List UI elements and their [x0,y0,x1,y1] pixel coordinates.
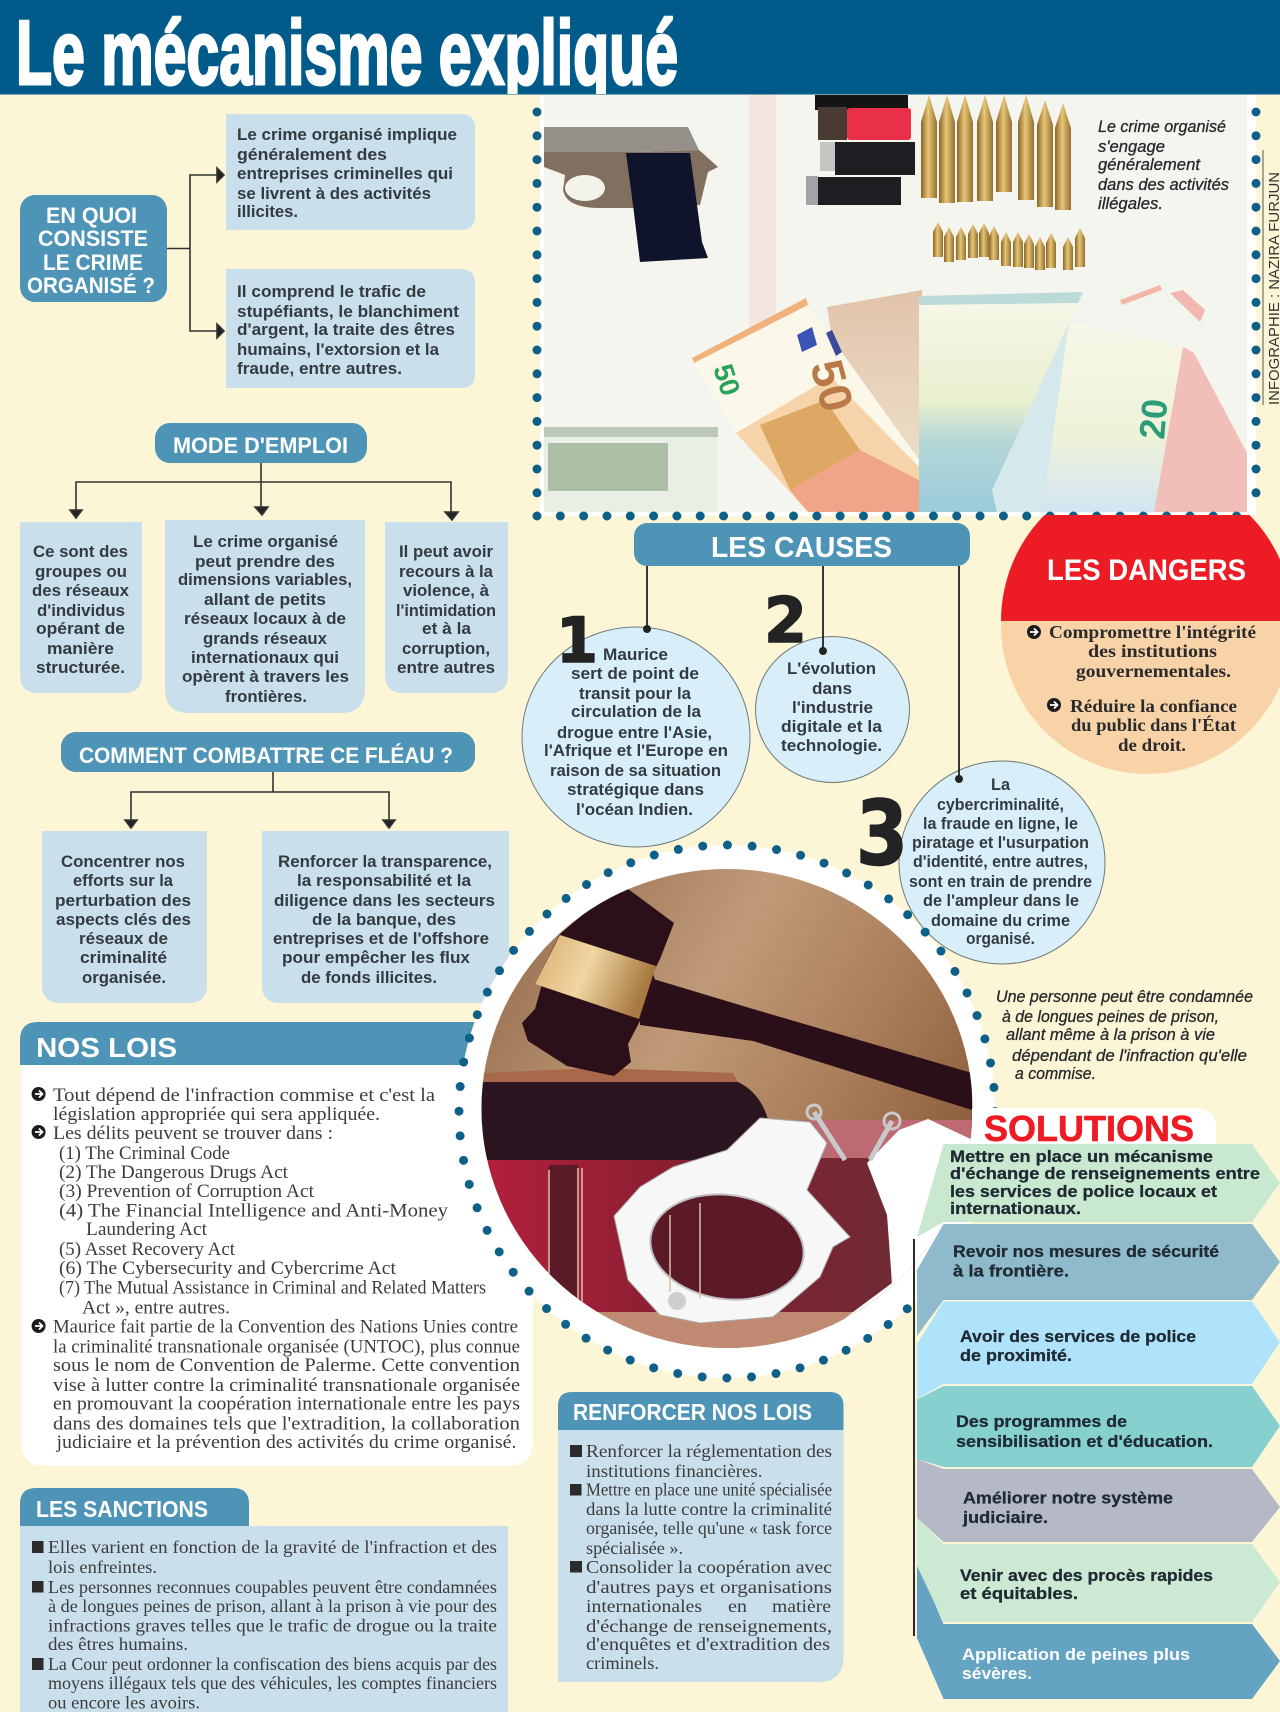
sanctions text: La Cour peut ordonner la confiscation des biens acquis par des [48,1654,497,1674]
sanctions heading [20,1488,249,1526]
causes heading pill: LES CAUSES [711,532,892,564]
red cap and peach disc [1001,515,1280,774]
solution 4 [917,1386,1280,1467]
renforcer text: dans la lutte contre la criminalité [586,1499,832,1519]
panel: les sanctions [20,1488,508,1712]
box: renforcer la transparence: entreprises et de l'offshore [273,929,489,948]
nos lois text: (4) The Financial Intelligence and Anti-Money [59,1202,449,1222]
definition box 2: d'argent, la traite des êtres [237,320,455,339]
sanctions text: des êtres humains. [48,1634,188,1654]
nos lois text: Tout dépend de l'infraction commise et c'est la [53,1086,435,1106]
box: dimensions: allant de petits [204,590,326,609]
renforcer text: d'autres pays et organisations [586,1577,832,1597]
sanctions text: ou encore les avoirs. [48,1692,200,1712]
sanctions body [20,1526,508,1712]
definition box 2: stupéfiants, le blanchiment [237,302,459,321]
icon: dollar note [544,427,718,512]
renforcer text: Mettre en place une unité spécialisée [586,1480,832,1500]
nos lois text: (5) Asset Recovery Act [59,1240,236,1260]
caption: weapons: illégales. [1098,195,1163,213]
box: renforcer la transparence: Renforcer la transparence, [278,852,492,871]
box: groupes: des réseaux [32,581,130,600]
solution 2: à la frontière. [953,1262,1069,1280]
box: groupes: d'individus [37,601,125,620]
sanctions text: Elles varient en fonction de la gravité de l'infraction et des [48,1537,497,1557]
box: groupes [20,522,142,693]
question badge [20,195,167,302]
solution 1 [917,1144,1280,1237]
box: dimensions: peut prendre des [195,552,335,571]
cause 3 circle: organisé. [966,929,1035,948]
cause 3 circle: 3 [856,781,908,885]
box: violence: Il peut avoir [399,542,493,561]
icon: shotgun shells [806,95,915,205]
panel: solutions [913,1108,1280,1699]
cause 1 circle: l'Afrique et l'Europe en [544,741,728,760]
caption: weapons: dans des activités [1098,176,1229,194]
icon: euro banknotes [692,280,1247,512]
nos lois text: vise à lutter contre la criminalité transnationale organisée [53,1376,520,1396]
cause 1 circle: transit pour la [579,684,692,703]
connector arrows [167,168,224,338]
cause 2 circle [756,584,910,782]
box: renforcer la transparence [262,831,509,1003]
caption: prison sentences: a commise. [1015,1065,1096,1083]
dangers text: gouvernementales. [1076,661,1231,681]
nos lois text: Les délits peuvent se trouver dans : [53,1124,333,1144]
caption: weapons: Le crime organisé [1098,118,1226,136]
renforcer text: en [728,1596,747,1616]
box: renforcer la transparence: de la banque, des [312,910,456,929]
caption: weapons [1098,118,1229,213]
icon: rifle bullets [921,95,1071,210]
box: dimensions: réseaux locaux à de [184,609,346,628]
panel: les dangers [1001,515,1280,774]
nos lois heading: NOS LOIS [36,1032,177,1063]
solution 2: Revoir nos mesures de sécurité [953,1242,1219,1261]
sanctions text [48,1537,497,1712]
panel: photo of weapons and cash [537,95,1256,516]
causes heading pill [634,523,970,566]
heading pill [155,423,367,463]
box: groupes: groupes ou [35,562,127,581]
panel: comment combattre ce fléau [42,732,509,1003]
panel: en quoi consiste le crime organisé [20,114,475,388]
box: dimensions: grands réseaux [203,629,328,648]
white photo frame [540,95,1256,516]
cause 3 circle: La [991,775,1011,794]
dangers text: de droit. [1118,735,1186,755]
cause 2 circle: dans [812,679,852,698]
cause 1 circle: l'océan Indien. [576,800,693,819]
solution 7: sévères. [962,1664,1032,1683]
nos lois text: Act », entre autres. [82,1298,230,1318]
caption: prison sentences [996,988,1253,1083]
solutions heading tab: SOLUTIONS [984,1108,1194,1149]
cause 2 circle: L'évolution [787,659,876,678]
cause 2 circle: technologie. [781,736,882,755]
nos lois text: dans des domaines tels que l'extradition, la collaboration [53,1414,520,1434]
box: violence: l'intimidation [396,601,496,620]
square bullets [32,1541,44,1670]
heading pill: MODE D'EMPLOI [173,433,348,458]
solution 1: d'échange de renseignements entre [950,1164,1260,1183]
renforcer text: d'enquêtes et d'extradition des [586,1634,830,1654]
renforcer text: institutions financières. [586,1461,762,1481]
connectors [643,566,963,783]
panel: les causes [522,523,1105,964]
caption: weapons: s'engage [1098,138,1165,156]
heading pill: COMMENT COMBATTRE CE FLÉAU ? [79,743,453,768]
box: dimensions: dimensions variables, [178,570,352,589]
dotted ring around justice photo [459,845,995,1378]
solution 3: de proximité. [960,1346,1072,1365]
box: renforcer la transparence: diligence dans les secteurs [274,891,495,910]
dangers heading: LES DANGERS [1047,554,1246,587]
banknote value 50 green: 50 [707,360,746,399]
solution 4: Des programmes de [956,1412,1127,1431]
question badge: CONSISTE [38,226,148,251]
book [481,1158,891,1312]
nos lois text: (7) The Mutual Assistance in Criminal and Related Matters [59,1278,486,1298]
nos lois text: sous le nom de Convention de Palerme. Cette convention [53,1356,520,1376]
nos lois text: (2) The Dangerous Drugs Act [59,1163,289,1183]
renforcer body [558,1430,844,1682]
box: violence: et à la [422,619,472,638]
cause 1 circle: circulation de la [571,702,702,721]
solution 6 [917,1518,1280,1622]
renforcer text: organisée, telle qu'une « task force [586,1518,832,1538]
solution 5: judiciaire. [962,1508,1048,1527]
solution 1: internationaux. [950,1199,1081,1218]
box: concentrer: réseaux de [79,929,168,948]
box: groupes: manière [47,639,114,658]
box: concentrer: perturbation des [55,891,191,910]
definition box 2 [226,269,475,388]
cause 2 circle: digitale et la [781,717,883,736]
box: dimensions: Le crime organisé [193,532,338,551]
box: dimensions: opèrent à travers les [182,667,349,686]
nos lois body [21,1065,533,1466]
nos lois heading [20,1022,500,1065]
nos lois text [53,1086,520,1453]
cause 1 circle: drogue entre l'Asie, [557,723,712,742]
question badge: ORGANISÉ ? [27,273,155,298]
handcuffs [614,1104,970,1324]
cause 1 circle: raison de sa situation [550,761,721,780]
panel: mode d'emploi [20,423,508,713]
question badge: LE CRIME [43,250,143,275]
box: violence: recours à la [399,562,494,581]
box: concentrer: aspects clés des [56,910,191,929]
box: concentrer: efforts sur la [73,871,174,890]
box: concentrer: criminalité [80,948,167,967]
box: concentrer: Concentrer nos [61,852,185,871]
cause 3 circle: sont en train de prendre [909,872,1092,891]
definition box 2: fraude, entre autres. [237,359,402,378]
definition box 1: entreprises criminelles qui [237,164,453,183]
timeline rule [913,1239,915,1636]
solution 5 [917,1459,1280,1542]
sanctions text: moyens illégaux tels que des véhicules, les comptes financiers [48,1673,497,1693]
sanctions text: à de longues peines de prison, allant à la prison à vie pour des [48,1596,497,1616]
renforcer text [586,1441,832,1673]
cause 1 circle: sert de point de [571,664,699,683]
dotted frame [537,112,1256,516]
renforcer text: Renforcer la réglementation des [586,1441,832,1461]
solution 5: Améliorer notre système [963,1488,1173,1508]
cause 1 circle: Maurice [603,645,668,664]
icon: pistol [544,127,718,262]
box: violence [385,522,508,693]
sanctions text: lois enfreintes. [48,1557,157,1577]
sanctions text: Les personnes reconnues coupables peuvent être condamnées [48,1577,497,1597]
nos lois text: (6) The Cybersecurity and Cybercrime Act [59,1259,397,1279]
definition box 1: illicites. [237,202,298,221]
dangers text: du public dans l'État [1071,714,1236,735]
caption: prison sentences: Une personne peut être condamnée [996,988,1253,1006]
cause 3 circle: piratage et l'usurpation [912,833,1089,852]
panel: nos lois [20,1022,533,1466]
sound block [481,1068,771,1160]
renforcer heading [558,1392,844,1430]
box: concentrer [42,831,207,1003]
caption: prison sentences: à de longues peines de prison, [1002,1008,1219,1026]
panel: renforcer nos lois [558,1392,844,1682]
banknote value 50 orange: 50 [800,354,864,417]
renforcer text: d'échange de renseignements, [586,1616,832,1636]
photo: gavel, book and handcuffs [481,862,975,1354]
nos lois text: (1) The Criminal Code [59,1144,230,1164]
connector arrows [70,463,458,520]
dangers text: Réduire la confiance [1070,696,1237,716]
caption: weapons: généralement [1098,156,1201,174]
cause 3 circle: domaine du crime [931,911,1070,930]
caption: prison sentences: allant même à la prison à vie [1006,1026,1215,1044]
dangers text: des institutions [1088,641,1217,661]
dangers text: Compromettre l'intégrité [1049,622,1256,642]
solution 7: Application de peines plus [962,1645,1190,1664]
caption: prison sentences: dépendant de l'infraction qu'elle [1012,1047,1247,1065]
square bullets [570,1445,582,1572]
solution 7 [917,1562,1280,1699]
definition box 1 [226,114,475,230]
sanctions text: infractions graves telles que le trafic de drogue ou la traite [48,1616,497,1636]
nos lois text: (3) Prevention of Corruption Act [59,1182,315,1202]
renforcer text: matière [772,1596,831,1616]
box: groupes: structurée. [36,658,125,677]
box: groupes: Ce sont des [33,542,128,561]
bullet icons [1027,625,1061,712]
box: dimensions: frontières. [225,687,307,706]
sanctions heading: LES SANCTIONS [36,1496,208,1522]
renforcer text: Consolider la coopération avec [586,1557,832,1577]
cause 1 circle [522,604,750,847]
cause 2 circle: l'industrie [792,698,873,717]
box: violence: corruption, [402,639,490,658]
photo illustration [544,95,1247,512]
nos lois text: en promouvant la coopération internationale entre les pays [53,1394,520,1414]
box: dimensions [165,520,365,713]
cause 2 circle: 2 [764,584,807,657]
nos lois text: judiciaire et la prévention des activités du crime organisé. [55,1433,517,1453]
box: renforcer la transparence: pour empêcher les flux [282,948,471,967]
cause 3 circle: la fraude en ligne, le [923,814,1078,833]
definition box 1: généralement des [237,145,387,164]
definition box 1: se livrent à des activités [237,184,431,203]
cause 3 circle: de l'ampleur dans le [923,891,1079,910]
white disc behind justice photo [459,845,995,1378]
box: groupes: opérant de [36,619,125,638]
banknote value 20: 20 [1131,397,1175,441]
heading pill [61,732,475,772]
cause 3 circle: d'identité, entre autres, [913,852,1088,871]
renforcer text: criminels. [586,1653,659,1673]
box: violence: entre autres [397,658,495,677]
header banner [0,0,1280,104]
box: dimensions: internationaux qui [191,648,339,667]
gavel [522,889,972,1110]
nos lois text: la criminalité transnationale organisée (UNTOC), plus connue [53,1338,520,1358]
box: renforcer la transparence: de fonds illicites. [301,968,437,987]
definition box 2: humains, l'extorsion et la [237,340,440,359]
question badge: EN QUOI [46,203,137,228]
nos lois text: Laundering Act [86,1220,208,1240]
solution 2 [917,1224,1280,1336]
icon: small bullets [933,222,1085,270]
cause 3 circle [856,761,1105,964]
table [591,1308,863,1348]
definition box 1: Le crime organisé implique [237,125,457,144]
nos lois text: Maurice fait partie de la Convention des Nations Unies contre [53,1318,518,1338]
definition box 2: Il comprend le trafic de [237,282,426,301]
renforcer text: internationales [586,1596,702,1616]
title: Le mécanisme expliqué [16,3,678,104]
bullet icons [32,1087,46,1333]
cause 3 circle: cybercriminalité, [937,795,1064,814]
solution 3 [917,1302,1280,1399]
cause 1 circle: 1 [556,604,598,677]
renforcer text: spécialisée ». [586,1538,683,1558]
renforcer heading: RENFORCER NOS LOIS [573,1399,812,1425]
box: renforcer la transparence: la responsabilité et la [297,871,472,890]
solution 3: Avoir des services de police [960,1327,1196,1346]
box: violence: violence, à [403,581,490,600]
connector arrows [125,772,395,828]
box: concentrer: organisée. [82,968,166,987]
dangers text [1049,622,1256,755]
solution 4: sensibilisation et d'éducation. [956,1432,1213,1451]
solution 1: les services de police locaux et [950,1182,1217,1201]
solution 6: et équitables. [960,1584,1078,1603]
solution 1: Mettre en place un mécanisme [950,1147,1213,1166]
nos lois text: législation appropriée qui sera appliquée. [53,1105,380,1125]
solution 6: Venir avec des procès rapides [960,1566,1213,1585]
cause 1 circle: stratégique dans [567,780,704,799]
